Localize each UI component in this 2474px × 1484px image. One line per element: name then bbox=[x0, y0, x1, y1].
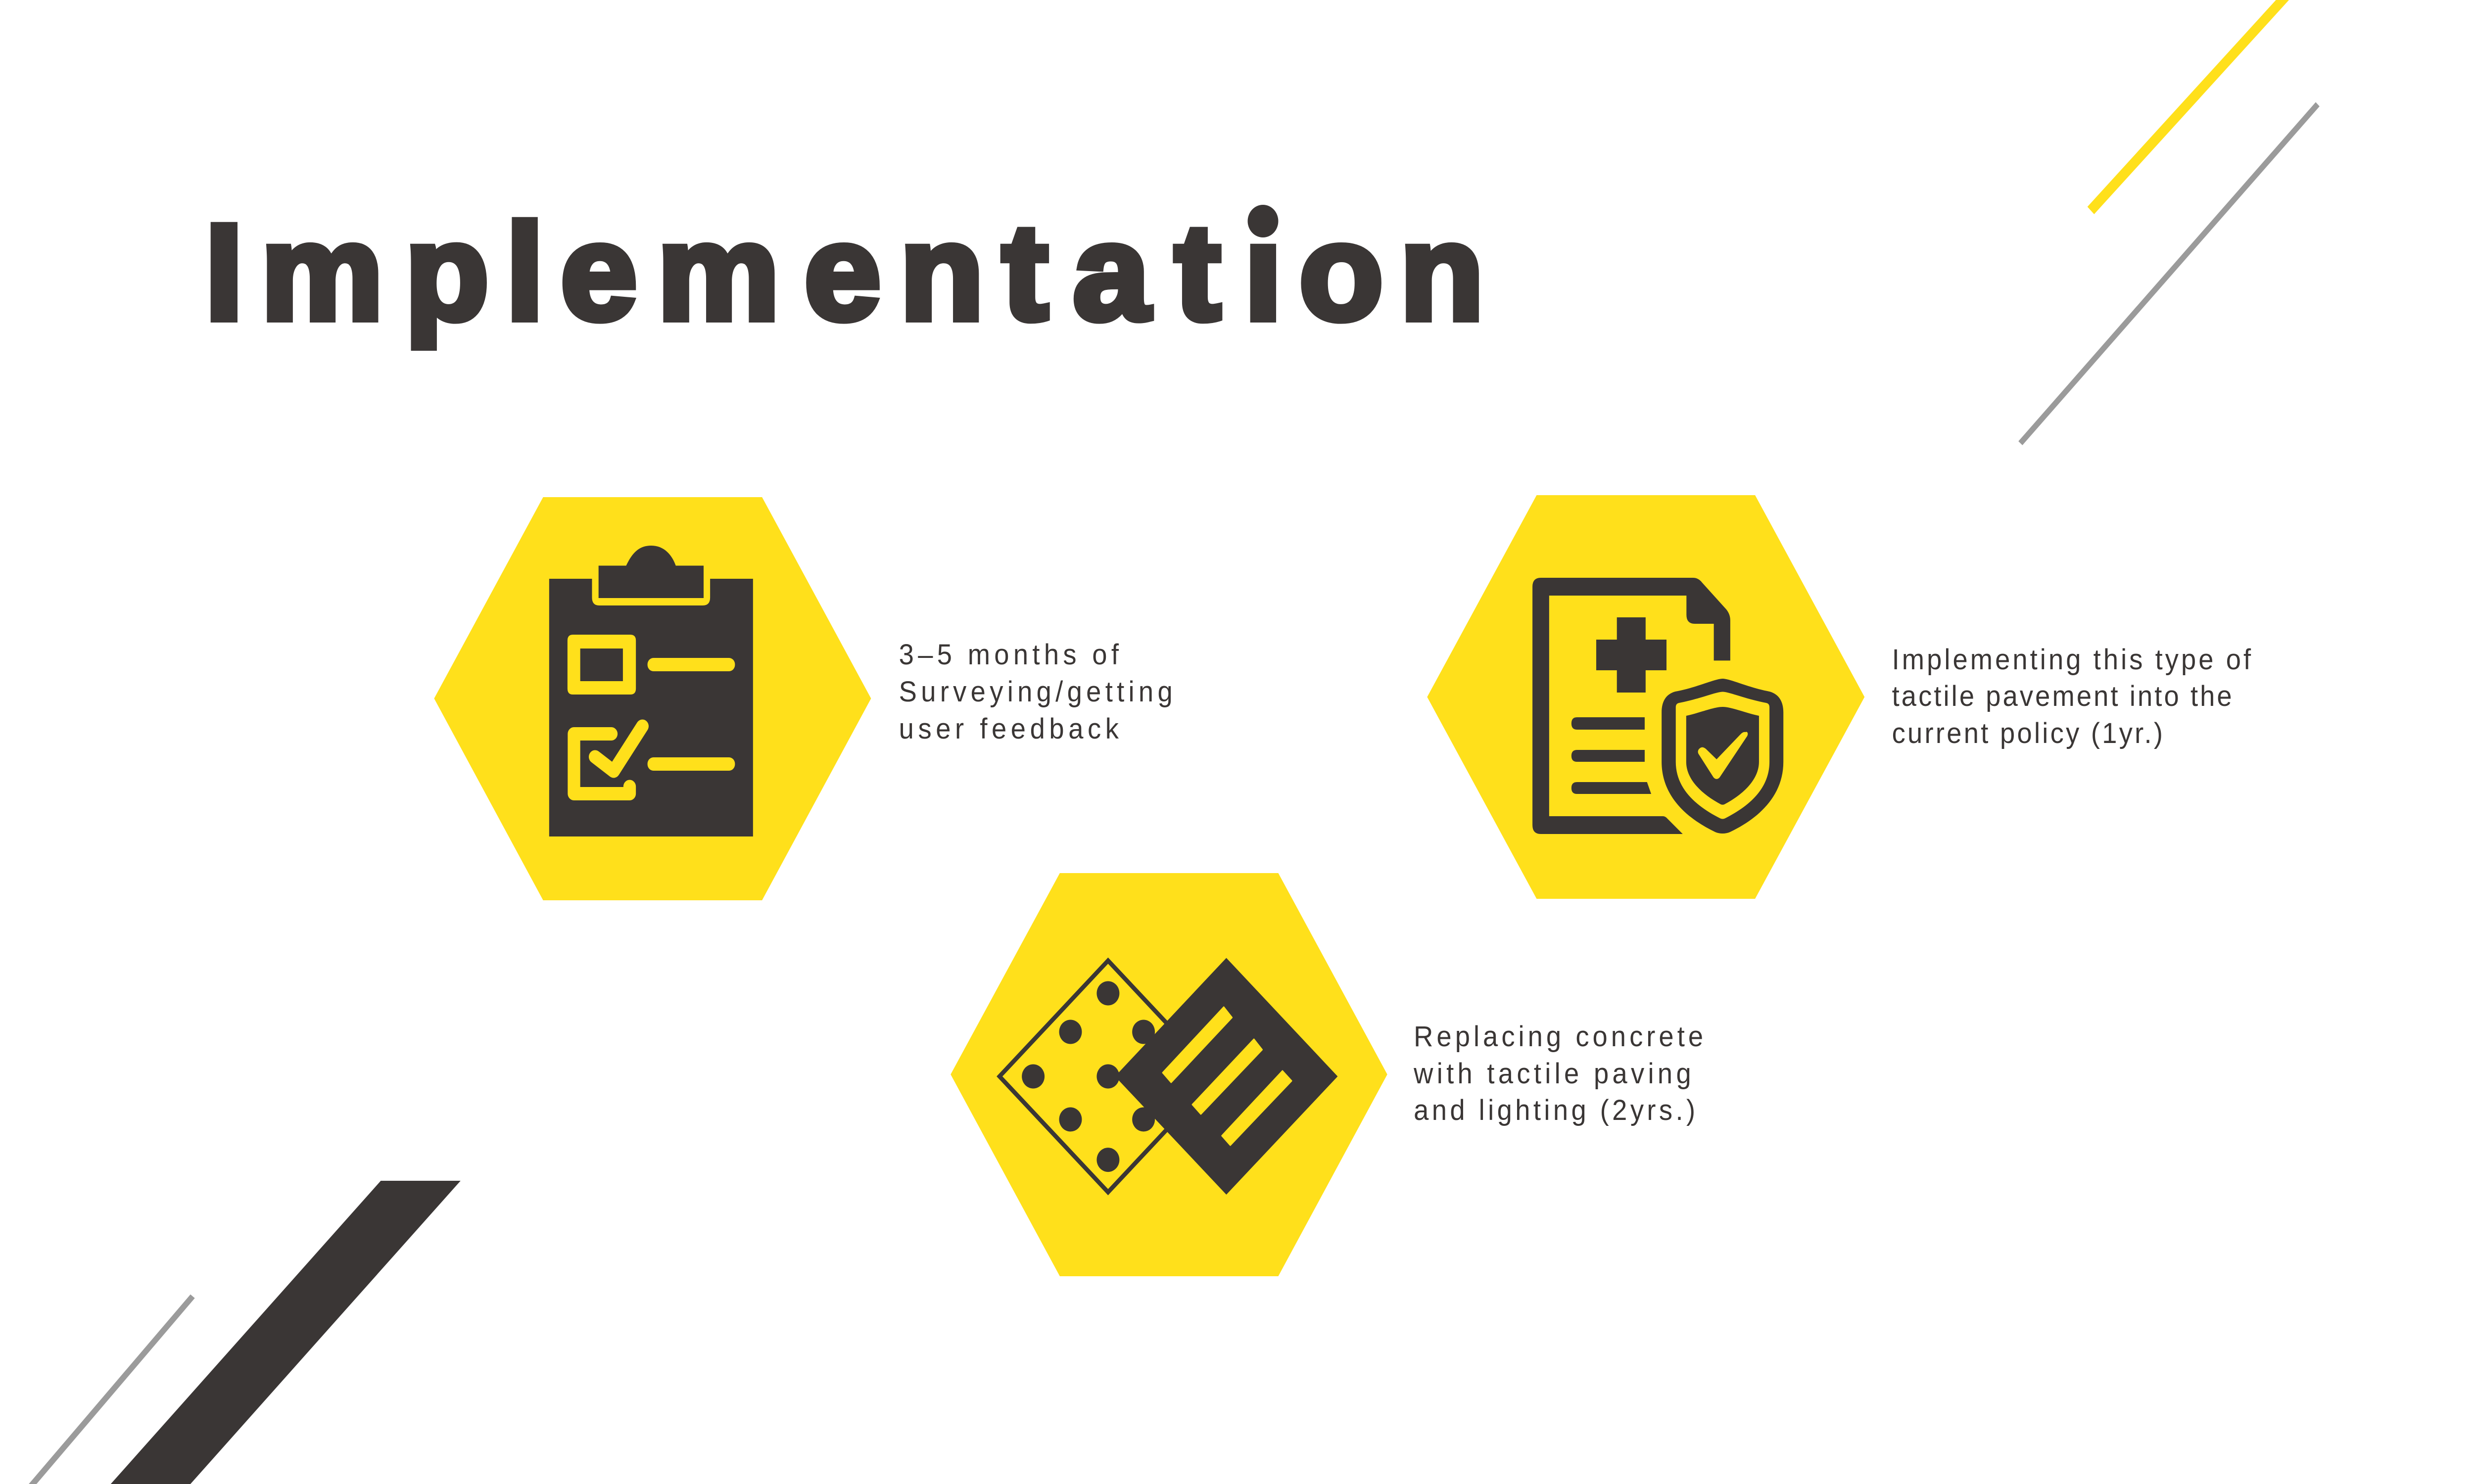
hexagon: policy bbox=[1427, 495, 1864, 899]
decorative diagonal: top right yellow bbox=[2088, 0, 2289, 214]
decorative diagonal: bottom left gray bbox=[29, 1295, 195, 1484]
text: policy description: Implementing this type of bbox=[1892, 643, 2251, 675]
panel: policy step bbox=[1427, 495, 2261, 899]
decorative diagonal: bottom left dark bbox=[111, 1181, 461, 1484]
text: paving description: Replacing concrete bbox=[1414, 1020, 1703, 1052]
icon: medical document with shield bbox=[1532, 578, 1783, 834]
title: Implementation bbox=[205, 196, 1484, 349]
text: surveying description: 3–5 months of bbox=[899, 638, 1119, 670]
icon: clipboard checklist bbox=[549, 546, 753, 836]
text: policy description: tactile pavement into the bbox=[1892, 680, 2232, 712]
panel: paving step bbox=[951, 873, 1714, 1276]
text: paving description: and lighting (2yrs.) bbox=[1414, 1094, 1695, 1126]
text: surveying description: Surveying/getting bbox=[899, 675, 1173, 707]
text: paving description: with tactile paving bbox=[1413, 1057, 1691, 1089]
hexagon: surveying bbox=[434, 497, 871, 900]
hexagon: paving bbox=[951, 873, 1387, 1276]
text: surveying description: user feedback bbox=[899, 712, 1119, 744]
decorative diagonal: top right gray bbox=[2018, 102, 2320, 445]
panel: surveying step bbox=[434, 497, 1184, 900]
icon: tactile paving tiles bbox=[999, 958, 1337, 1195]
text: policy description: current policy (1yr.) bbox=[1892, 717, 2163, 749]
